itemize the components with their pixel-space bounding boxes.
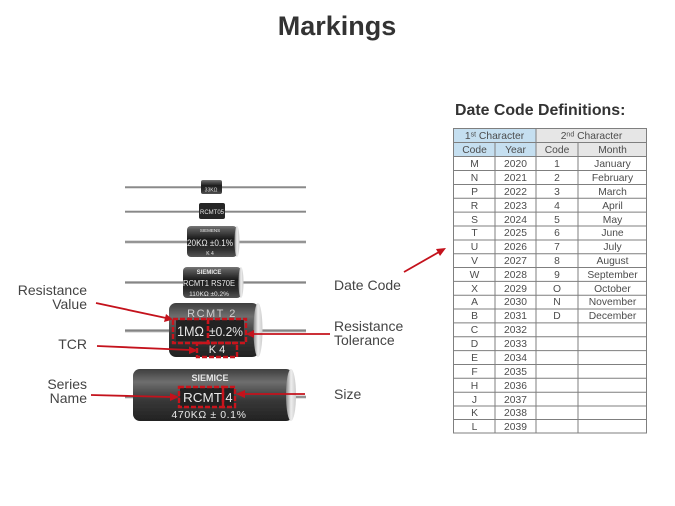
- label: series name: Series: [47, 376, 87, 392]
- resistor 5: ±0.2%: [209, 324, 243, 339]
- table body text: J: [472, 395, 477, 406]
- table body text: N: [553, 297, 561, 308]
- resistor 4: RCMT1 RS70E: [183, 278, 235, 288]
- table body text: 7: [554, 242, 560, 253]
- resistor 2: RCMT05: [200, 210, 225, 216]
- resistor 3: 20KΩ ±0.1%: [187, 238, 233, 249]
- table header text: Code: [462, 145, 487, 156]
- table body text: 9: [554, 270, 560, 281]
- resistor 3: [125, 226, 306, 257]
- table body text: 2: [554, 173, 560, 184]
- table body text: E: [471, 353, 478, 364]
- table header text: Character: [476, 131, 525, 142]
- table body text: 2027: [504, 256, 527, 267]
- resistor 3: SIEMENS: [200, 228, 220, 233]
- label: series name: Name: [50, 390, 87, 406]
- table body text: March: [598, 187, 627, 198]
- table header text: st: [471, 132, 476, 138]
- date code table: [453, 128, 647, 433]
- title: Markings: [278, 11, 396, 41]
- table body text: L: [472, 422, 478, 433]
- table body text: U: [471, 242, 478, 253]
- table body text: 2026: [504, 242, 527, 253]
- table body text: 2029: [504, 284, 527, 295]
- table body text: H: [471, 381, 478, 392]
- table body text: May: [603, 215, 623, 226]
- resistor 1: [125, 180, 306, 194]
- table body text: O: [553, 284, 561, 295]
- table body text: B: [471, 311, 478, 322]
- table body text: November: [589, 297, 637, 308]
- table header text: 2: [561, 131, 566, 142]
- table body text: 3: [554, 187, 560, 198]
- table body text: August: [596, 256, 629, 267]
- table body text: P: [471, 187, 478, 198]
- table grid: [453, 128, 647, 433]
- resistor 5: K 4: [209, 344, 225, 356]
- table header text: Character: [574, 131, 623, 142]
- table header text: [462, 131, 627, 156]
- heading: date code definitions: Date Code Definitions:: [455, 102, 625, 119]
- table body text: September: [587, 270, 638, 281]
- resistor 4: [125, 267, 306, 298]
- arrow: TCR: [97, 346, 198, 354]
- table body text: October: [594, 284, 631, 295]
- table body text: June: [601, 228, 624, 239]
- table body text: N: [471, 173, 478, 184]
- label: TCR: TCR: [58, 336, 87, 352]
- table header text: 1: [465, 131, 471, 142]
- arrow: resistance value: [96, 303, 173, 322]
- table body text: 2036: [504, 381, 527, 392]
- table body text: 5: [554, 215, 560, 226]
- arrow: resistance tolerance: [246, 330, 330, 338]
- table header text: Month: [598, 145, 627, 156]
- table header text: nd: [566, 132, 574, 138]
- resistor 3: K 4: [206, 251, 214, 257]
- table body text: July: [603, 242, 623, 253]
- table body text: V: [471, 256, 478, 267]
- table body text: 2028: [504, 270, 527, 281]
- table body text: X: [471, 284, 478, 295]
- resistor 4: 110KΩ ±0.2%: [189, 291, 229, 298]
- table body text: 2032: [504, 325, 527, 336]
- table body text: 2021: [504, 173, 527, 184]
- table body text: 2033: [504, 339, 527, 350]
- table header fills: [453, 128, 647, 157]
- table body text: 1: [554, 159, 560, 170]
- table body text: 2035: [504, 367, 527, 378]
- table body text: 2034: [504, 353, 527, 364]
- table body text: F: [471, 367, 478, 378]
- table body text: A: [471, 297, 478, 308]
- red dashed marking boxes: [173, 319, 246, 407]
- label: resistance value: Resistance: [18, 282, 87, 298]
- table body text: 4: [554, 201, 560, 212]
- resistor 6: SIEMICE: [191, 373, 229, 383]
- table body text: D: [471, 339, 478, 350]
- table body text: February: [592, 173, 634, 184]
- table body text: 8: [554, 256, 560, 267]
- table body text: 6: [554, 228, 560, 239]
- resistor 5: 1MΩ: [177, 323, 204, 339]
- label: date code: Date Code: [334, 277, 401, 293]
- table body text: D: [553, 311, 561, 322]
- table body text: M: [470, 159, 479, 170]
- label: resistance value: Value: [52, 296, 87, 312]
- table body text: K: [471, 408, 478, 419]
- resistor 2: [125, 203, 306, 219]
- table body text: C: [471, 325, 479, 336]
- label: size: Size: [334, 386, 361, 402]
- table body text: 2039: [504, 422, 527, 433]
- resistor 4: SIEMICE: [197, 270, 221, 276]
- table header text: Code: [545, 145, 570, 156]
- table header text: Year: [505, 145, 526, 156]
- resistor 6: RCMT: [183, 390, 222, 405]
- resistor 6: 4: [225, 390, 233, 405]
- table body text: 2038: [504, 408, 527, 419]
- resistor 6: 470KΩ ± 0.1%: [171, 409, 247, 421]
- table body text: 2025: [504, 228, 527, 239]
- resistor 5: [125, 303, 306, 357]
- resistor 6: [125, 369, 306, 421]
- arrow: date code: [404, 248, 446, 272]
- resistor 5: RCMT 2: [187, 308, 237, 320]
- table body text: 2030: [504, 297, 527, 308]
- table body text: T: [471, 228, 478, 239]
- table body text: April: [602, 201, 623, 212]
- table body text: [470, 159, 638, 433]
- table body text: 2023: [504, 201, 527, 212]
- arrow: size: [236, 390, 305, 398]
- table body text: 2037: [504, 395, 527, 406]
- table body text: 2024: [504, 215, 527, 226]
- table body text: R: [471, 201, 478, 212]
- resistor 1: 33KΩ: [205, 188, 218, 194]
- table body text: 2020: [504, 159, 527, 170]
- label: resistance tolerance: Tolerance: [334, 332, 395, 348]
- arrow: series name: [91, 393, 179, 401]
- resistor illustrations: [125, 180, 306, 421]
- table body text: December: [589, 311, 637, 322]
- label: resistance tolerance: Resistance: [334, 318, 403, 334]
- table body text: 2022: [504, 187, 527, 198]
- table body text: January: [594, 159, 632, 170]
- table body text: 2031: [504, 311, 527, 322]
- table body text: W: [470, 270, 480, 281]
- table body text: S: [471, 215, 478, 226]
